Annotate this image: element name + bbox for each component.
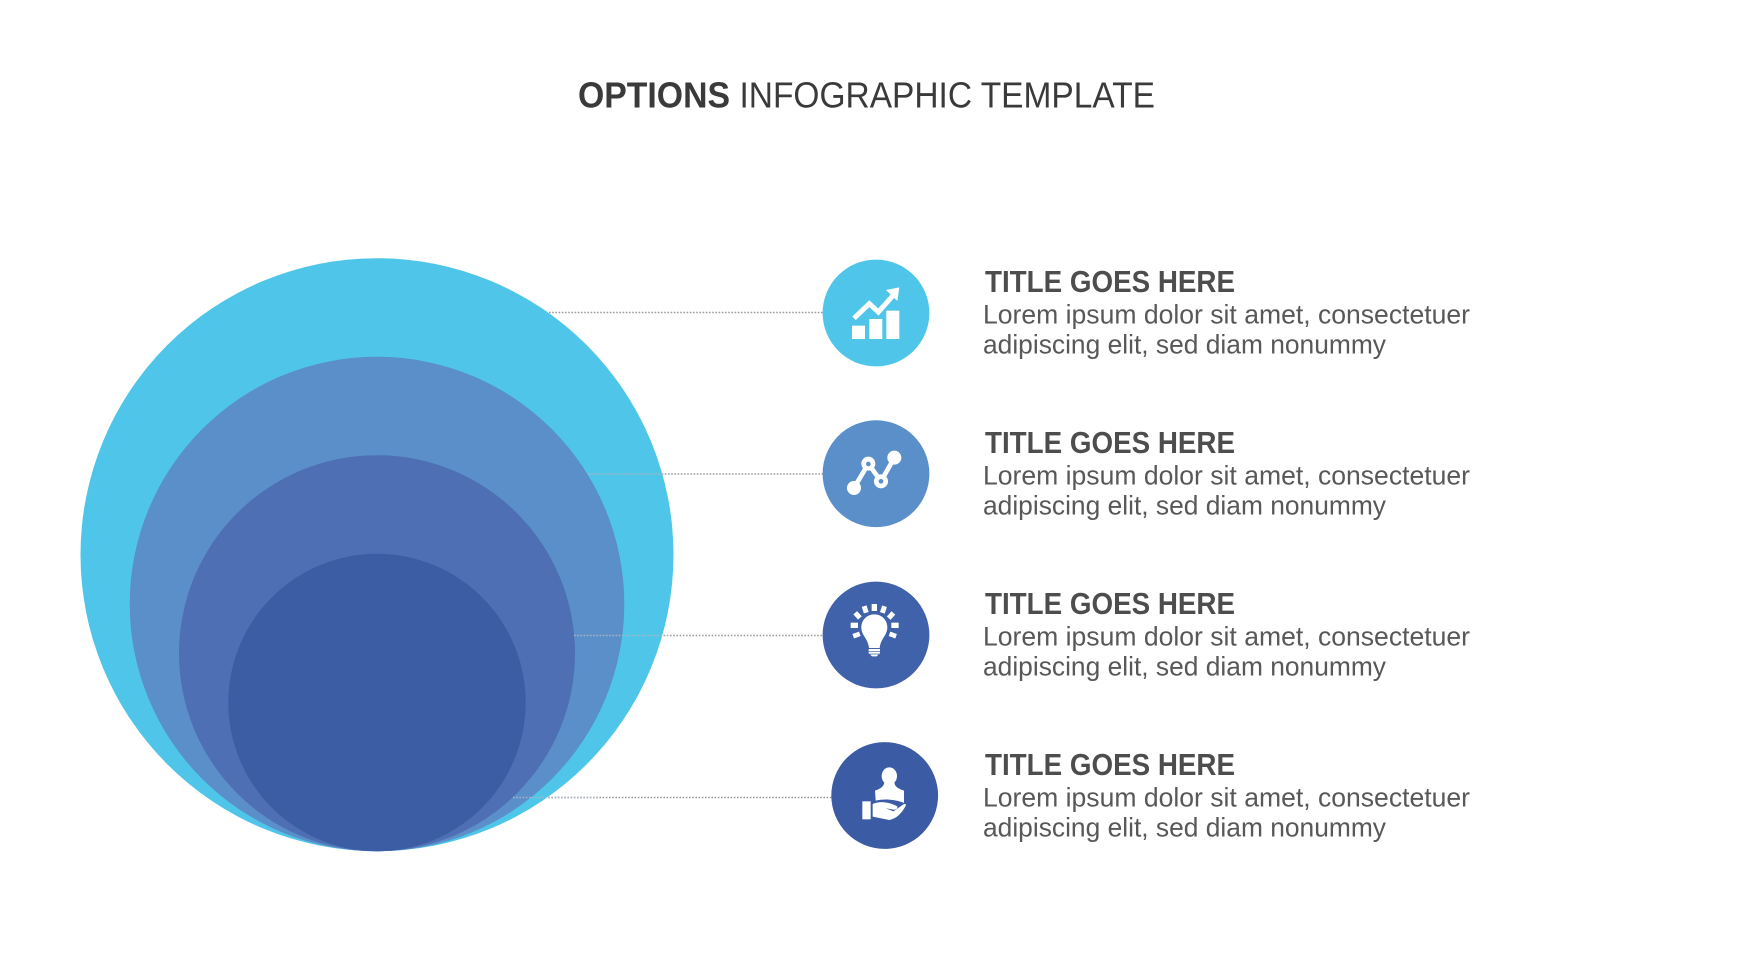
text: option 1: TITLE GOES HERE [985, 265, 1235, 299]
nested circles diagram [80, 258, 674, 851]
text: option 1 [983, 265, 1470, 360]
option 3 [823, 582, 1470, 688]
option 2 [823, 420, 1470, 527]
option 1 [823, 260, 1470, 366]
icon: light bulb [823, 582, 929, 688]
text: option 4 [983, 748, 1470, 842]
text: option 2: Lorem ipsum dolor sit amet, consectetuer [983, 460, 1470, 490]
text: option 3: adipiscing elit, sed diam nonummy [983, 652, 1387, 682]
text: option 2: TITLE GOES HERE [985, 426, 1235, 460]
option 4 [831, 742, 1470, 849]
text: option 1: Lorem ipsum dolor sit amet, consectetuer [983, 300, 1470, 330]
text: option 2: adipiscing elit, sed diam nonummy [983, 490, 1387, 520]
text: option 4: adipiscing elit, sed diam nonummy [983, 812, 1387, 842]
text: option 2 [983, 426, 1470, 520]
text: option 4: Lorem ipsum dolor sit amet, consectetuer [983, 782, 1470, 812]
text: option 4: TITLE GOES HERE [985, 748, 1235, 782]
icon: line graph nodes [823, 420, 929, 527]
text: option 1: adipiscing elit, sed diam nonummy [983, 330, 1387, 360]
title: INFOGRAPHIC TEMPLATE [740, 75, 1155, 116]
connector lines over circles [513, 474, 673, 798]
text: option 3: Lorem ipsum dolor sit amet, consectetuer [983, 622, 1470, 652]
title [578, 75, 1155, 116]
icon: person on hand [831, 742, 938, 849]
connector lines [513, 312, 832, 798]
icon: growth chart [823, 260, 929, 366]
text: option 3 [983, 587, 1470, 682]
text: option 3: TITLE GOES HERE [985, 587, 1235, 621]
title: OPTIONS [578, 75, 730, 116]
